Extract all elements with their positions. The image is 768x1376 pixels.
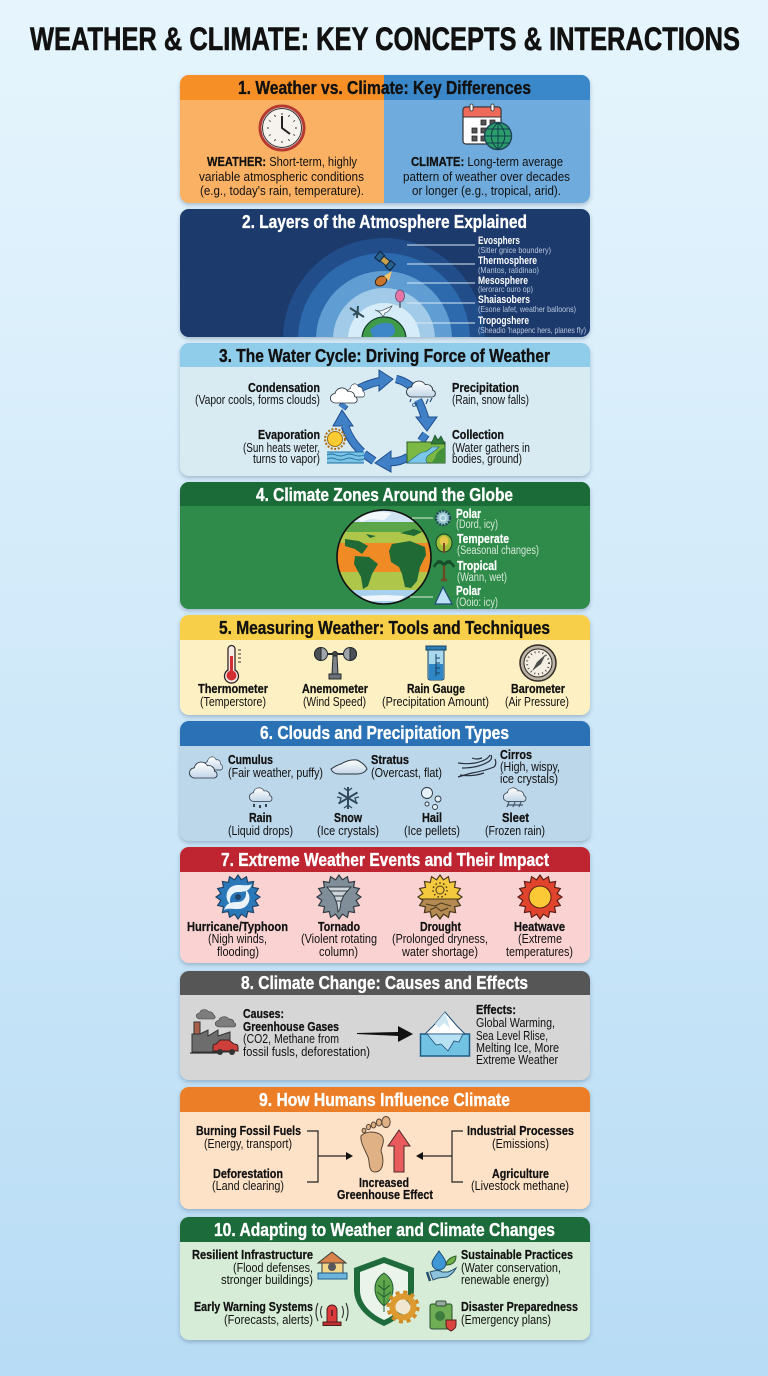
icon: rain gauge — [426, 646, 446, 680]
text: effects: Sea Level Rlise, — [476, 1028, 548, 1043]
text: causes: Causes: — [243, 1006, 284, 1021]
diagram: cycle arrows — [333, 370, 437, 472]
event labels: (Extreme — [518, 931, 562, 946]
event labels: (Prolonged dryness, — [392, 931, 488, 946]
icon: sleet — [503, 788, 526, 807]
heading 1: 1. Weather vs. Climate: Key Differences — [238, 78, 531, 98]
icon: cirrus — [458, 755, 496, 777]
layer labels: Shaiasobers — [478, 294, 530, 306]
text: collection: bodies, ground) — [452, 451, 522, 466]
text: left influences — [196, 1123, 301, 1193]
arrow: left bracket — [307, 1131, 353, 1182]
text: cumulus: Cumulus — [228, 752, 273, 767]
icon: stratus — [331, 760, 367, 774]
heading 6: 6. Clouds and Precipitation Types — [260, 723, 509, 743]
icon: collection landscape — [407, 435, 445, 463]
text: collection — [452, 427, 530, 466]
text: early warning: Early Warning Systems — [194, 1299, 313, 1314]
text: right influences — [467, 1123, 574, 1193]
tool labels: Barometer — [511, 681, 565, 696]
heading 7: 7. Extreme Weather Events and Their Impact — [221, 850, 549, 870]
zone labels: Polar — [456, 506, 481, 521]
panel 2: layers of the atmosphere — [178, 208, 592, 342]
panel 10: adapting — [180, 1217, 590, 1340]
icon: plane — [350, 306, 364, 318]
event labels: (Violent rotating — [301, 931, 377, 946]
text: causes: (CO2, Methane from — [243, 1031, 339, 1046]
text: effects: Effects: — [476, 1002, 516, 1017]
panel 3: water cycle — [180, 343, 590, 476]
chart: globe of climate bands — [337, 510, 431, 605]
icon: barometer — [520, 645, 556, 681]
event labels: flooding) — [217, 944, 259, 959]
layer labels: (lerorarc ouro op) — [478, 284, 533, 294]
event labels: water shortage) — [401, 944, 478, 959]
zone labels: (Wann, wet) — [457, 572, 507, 584]
text: early warning — [194, 1299, 313, 1327]
zone labels: Tropical — [457, 558, 497, 573]
panel 9: human influence — [180, 1087, 590, 1209]
precipitation labels: (Ice pellets) — [404, 823, 460, 838]
text: condensation: Condensation — [248, 380, 320, 395]
icon: polar iceberg — [435, 587, 452, 604]
heading 5: 5. Measuring Weather: Tools and Techniques — [219, 618, 550, 638]
text: collection: (Water gathers in — [452, 440, 530, 455]
precipitation labels: Snow — [334, 810, 363, 825]
text: resilient infrastructure: (Flood defenses, — [233, 1260, 313, 1275]
text: evaporation — [243, 427, 320, 466]
panel 8: climate change — [180, 971, 590, 1080]
text: condensation — [195, 380, 320, 407]
text: effects: Extreme Weather — [476, 1052, 559, 1067]
event labels — [187, 919, 573, 959]
zone labels: (Dord, icy) — [456, 519, 498, 531]
icon: tropical palm — [434, 561, 454, 580]
leader lines — [410, 518, 433, 597]
icon: hail — [422, 788, 441, 810]
icon: polar snow — [436, 511, 450, 525]
zone labels: Temperate — [457, 531, 509, 546]
text: greenhouse effect — [337, 1175, 434, 1202]
icon: rain — [249, 788, 272, 808]
text: early warning: (Forecasts, alerts) — [224, 1312, 313, 1327]
text: climate definition: pattern of weather over decades — [403, 169, 570, 184]
text: causes: Greenhouse Gases — [243, 1019, 339, 1034]
layer labels: (Sitler gnice boundery) — [478, 245, 551, 255]
precipitation labels: Rain — [249, 810, 272, 825]
panel 7: extreme weather — [180, 847, 590, 963]
layer labels: (Esone lafet, weather balloons) — [478, 304, 576, 314]
text: sustainable practices — [461, 1247, 573, 1287]
text: cumulus: (Fair weather, puffy) — [228, 765, 323, 780]
text: sustainable practices: renewable energy) — [461, 1272, 549, 1287]
event labels: Drought — [420, 919, 462, 934]
precipitation labels: (Ice crystals) — [317, 823, 379, 838]
leader lines — [407, 245, 475, 323]
text: left influences: Burning Fossil Fuels — [196, 1123, 301, 1138]
text: precipitation: (Rain, snow falls) — [452, 392, 529, 407]
icon: balloon — [396, 290, 404, 308]
event labels: Tornado — [318, 919, 360, 934]
layer labels: Tropogshere — [478, 315, 529, 327]
panel 1: weather vs climate — [180, 75, 590, 203]
text: right influences: Industrial Processes — [467, 1123, 574, 1138]
heading 2: 2. Layers of the Atmosphere Explained — [242, 212, 527, 232]
text: stratus: (Overcast, flat) — [371, 765, 442, 780]
text: left influences: (Land clearing) — [212, 1178, 284, 1193]
text: climate definition — [403, 154, 570, 198]
icon: drought — [418, 875, 462, 919]
text: disaster preparedness — [461, 1299, 578, 1327]
icon: temperate tree — [436, 534, 452, 553]
precipitation labels: Sleet — [502, 810, 530, 825]
text: cirrus: Cirros — [500, 747, 532, 762]
precipitation labels — [228, 810, 545, 838]
event labels: Hurricane/Typhoon — [187, 919, 288, 934]
arrow: causes to effects — [357, 1026, 413, 1042]
icon: warning siren — [316, 1303, 348, 1326]
text: resilient infrastructure — [192, 1247, 313, 1287]
icon: cumulus — [189, 757, 223, 778]
text: causes — [243, 1006, 370, 1059]
precipitation labels: (Frozen rain) — [485, 823, 545, 838]
text: sustainable practices: (Water conservation, — [461, 1260, 561, 1275]
text: weather definition: variable atmospheric conditions — [199, 169, 364, 184]
text: cirrus: (High, wispy, — [500, 759, 560, 774]
tool labels: (Air Pressure) — [505, 694, 569, 709]
tool labels: (Temperstore) — [200, 694, 266, 709]
text: cirrus — [500, 747, 560, 786]
tool labels: (Wind Speed) — [303, 694, 366, 709]
heading 9: 9. How Humans Influence Climate — [259, 1090, 510, 1110]
text: weather definition: (e.g., today's rain, temperature). — [200, 183, 364, 198]
heading 3: 3. The Water Cycle: Driving Force of Weather — [219, 346, 550, 366]
text: evaporation: turns to vapor) — [253, 451, 320, 466]
text: right influences: Agriculture — [492, 1166, 549, 1181]
text: precipitation — [452, 380, 529, 407]
icon: shield with leaf and gear — [354, 1257, 418, 1326]
text: weather definition: WEATHER: Short-term, highly — [207, 154, 357, 169]
icon: calendar and globe — [463, 104, 512, 150]
event labels: column) — [319, 944, 358, 959]
icon: up arrow — [388, 1130, 410, 1172]
icon: tornado — [317, 875, 361, 919]
icon: satellite — [375, 252, 395, 270]
heading 10: 10. Adapting to Weather and Climate Changes — [214, 1220, 555, 1240]
zone labels: (Seasonal changes) — [457, 545, 539, 557]
text: disaster preparedness: (Emergency plans) — [461, 1312, 551, 1327]
event labels: Heatwave — [514, 919, 565, 934]
icon: carbon footprint — [361, 1116, 390, 1172]
text: weather definition — [199, 154, 364, 198]
text: evaporation: Evaporation — [258, 427, 320, 442]
text: right influences: (Livestock methane) — [471, 1178, 569, 1193]
panel 4: climate zones — [180, 482, 590, 609]
heading 8: 8. Climate Change: Causes and Effects — [241, 973, 528, 993]
tool labels: Thermometer — [198, 681, 268, 696]
event labels: (Nigh winds, — [208, 931, 267, 946]
panel 5: measuring weather — [180, 615, 590, 715]
icon: water drop and hand — [427, 1251, 456, 1281]
text: left influences: (Energy, transport) — [204, 1136, 292, 1151]
text: climate definition: or longer (e.g., tropical, arid). — [412, 183, 561, 198]
icon: bird — [375, 306, 392, 317]
icon: sun and waves — [325, 429, 364, 463]
text: effects — [476, 1002, 559, 1067]
layer labels: (Mantos, ratidinao) — [478, 265, 539, 275]
text: condensation: (Vapor cools, forms clouds) — [195, 392, 320, 407]
text: sustainable practices: Sustainable Practices — [461, 1247, 573, 1262]
text: resilient infrastructure: Resilient Infrastructure — [192, 1247, 313, 1262]
text: cirrus: ice crystals) — [500, 771, 558, 786]
icon: meteor — [374, 271, 392, 288]
text: right influences: (Emissions) — [492, 1136, 549, 1151]
layer labels: (Sheadio 'happenc hers, planes fly) — [478, 325, 586, 335]
icon: precipitation cloud — [406, 381, 435, 406]
precipitation labels: Hail — [422, 810, 442, 825]
layer labels: Evosphers — [478, 235, 520, 247]
event labels: temperatures) — [506, 944, 573, 959]
tool labels: Rain Gauge — [407, 681, 465, 696]
text: climate definition: CLIMATE: Long-term average — [411, 154, 563, 169]
icon: iceberg — [420, 1012, 470, 1056]
text: disaster preparedness: Disaster Preparedness — [461, 1299, 578, 1314]
icon: condensation clouds — [330, 384, 365, 403]
text: effects: Global Warming, — [476, 1015, 555, 1030]
icon: factory and car — [190, 1010, 238, 1055]
icon: flood-resilient house — [318, 1252, 347, 1279]
icon: thermometer — [225, 646, 241, 683]
text: precipitation: Precipitation — [452, 380, 519, 395]
icon: heatwave — [518, 875, 562, 919]
text: stratus — [371, 752, 442, 780]
tool labels — [198, 681, 569, 709]
tool labels: (Precipitation Amount) — [382, 694, 489, 709]
icon: clock — [260, 106, 304, 150]
diagram: atmosphere rings — [283, 238, 485, 337]
icon: hurricane — [216, 875, 260, 919]
arrow: right bracket — [416, 1131, 463, 1182]
zone labels — [456, 506, 539, 609]
text: stratus: Stratus — [371, 752, 409, 767]
precipitation labels: (Liquid drops) — [228, 823, 293, 838]
text: left influences: Deforestation — [213, 1166, 283, 1181]
text: greenhouse effect: Greenhouse Effect — [337, 1187, 434, 1202]
icon: snow — [337, 787, 359, 809]
text: evaporation: (Sun heats weter, — [243, 440, 320, 455]
icon: anemometer — [314, 648, 357, 679]
layer labels: Thermosphere — [478, 255, 537, 267]
zone labels: (Ooio: icy) — [456, 597, 498, 609]
icon: emergency clipboard — [430, 1301, 456, 1331]
text: cumulus — [228, 752, 323, 780]
text: resilient infrastructure: stronger buildings) — [221, 1272, 313, 1287]
text: greenhouse effect: Increased — [359, 1175, 409, 1190]
text: causes: fossil fusls, deforestation) — [243, 1044, 370, 1059]
zone labels: Polar — [456, 583, 481, 598]
text: effects: Melting Ice, More — [476, 1040, 559, 1055]
layer labels: Mesosphere — [478, 275, 528, 287]
layer labels — [478, 235, 586, 335]
panel 6: clouds and precipitation — [180, 721, 590, 841]
heading 4: 4. Climate Zones Around the Globe — [256, 485, 513, 505]
text: collection: Collection — [452, 427, 504, 442]
tool labels: Anemometer — [302, 681, 368, 696]
